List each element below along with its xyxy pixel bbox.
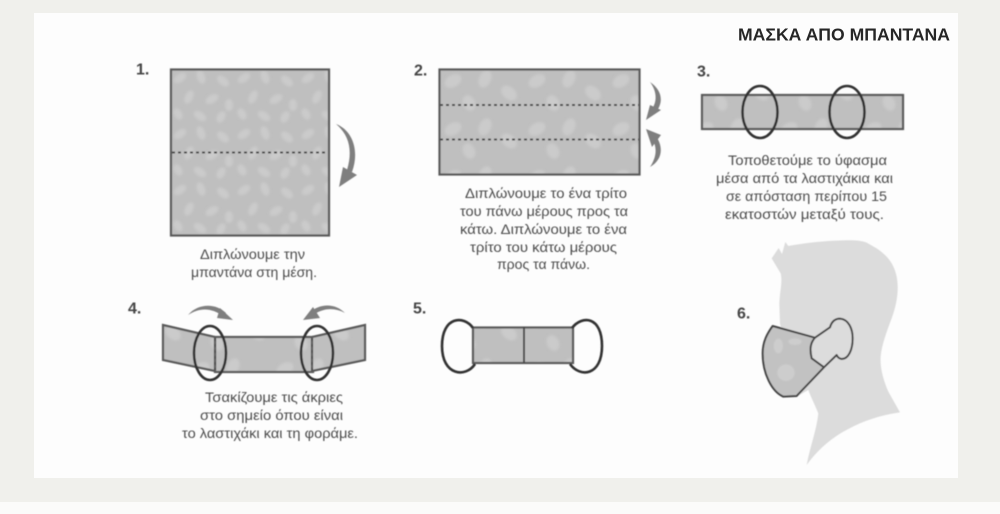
fabric with folded ends and elastics: [163, 325, 365, 380]
bottom strip: [0, 502, 1000, 514]
folded bandana with two fold lines: [440, 70, 640, 174]
caption step 4: [182, 389, 358, 441]
caption step 3: εκατοστών μεταξύ τους.: [725, 206, 884, 222]
step number 5: 5.: [413, 300, 426, 318]
square bandana with centre fold line: [171, 70, 329, 236]
title: ΜΑΣΚΑ ΑΠΟ ΜΠΑΝΤΑΝΑ: [738, 24, 950, 44]
step number 6: 6.: [737, 306, 750, 322]
profile of man wearing mask: [763, 240, 900, 465]
step number 4: 4.: [128, 300, 141, 318]
step number 2: 2.: [414, 62, 427, 80]
caption step 2: του πάνω μέρους προς τα: [460, 203, 628, 219]
step number 1: 1.: [136, 62, 149, 78]
arrow: bottom third up: [646, 129, 661, 167]
mask fabric spots: [774, 338, 802, 381]
step number 3: 3.: [697, 64, 710, 80]
caption step 4: το λαστιχάκι και τη φοράμε.: [182, 425, 358, 441]
arrow: right end inward: [303, 306, 345, 320]
caption step 1: [191, 246, 317, 280]
arrow: fold down: [336, 124, 357, 187]
arrow: top third down: [646, 82, 661, 120]
caption step 3: Τοποθετούμε το ύφασμα: [728, 152, 887, 168]
arrow: left end inward: [188, 306, 233, 320]
panel: step 2: [414, 62, 661, 272]
caption step 3: [716, 152, 893, 222]
panel: step 6: [737, 240, 900, 465]
caption step 3: μέσα από τα λαστιχάκια και: [716, 170, 893, 186]
caption step 2: τρίτο του κάτω μέρους: [470, 239, 617, 255]
caption step 2: [460, 185, 628, 272]
caption step 2: Διπλώνουμε το ένα τρίτο: [465, 185, 627, 201]
caption step 4: Τσακίζουμε τις άκριες: [205, 389, 343, 405]
caption step 2: κάτω. Διπλώνουμε το ένα: [460, 221, 627, 237]
mask: [763, 326, 824, 397]
caption step 4: στο σημείο όπου είναι: [200, 407, 343, 423]
caption step 3: σε απόσταση περίπου 15: [726, 188, 887, 204]
panel: step 1: [136, 62, 357, 280]
head silhouette: [772, 240, 900, 465]
caption step 2: προς τα πάνω.: [497, 256, 590, 272]
fabric strip threaded through elastics: [702, 86, 903, 138]
panel: step 3: [697, 64, 903, 222]
caption step 1: Διπλώνουμε την: [200, 246, 305, 262]
ear loop: [815, 319, 853, 367]
panel: step 4: [128, 300, 365, 441]
panel: step 5: [413, 300, 602, 372]
caption step 1: μπαντάνα στη μέση.: [191, 264, 317, 280]
finished mask flat with ear loops: [442, 320, 602, 372]
